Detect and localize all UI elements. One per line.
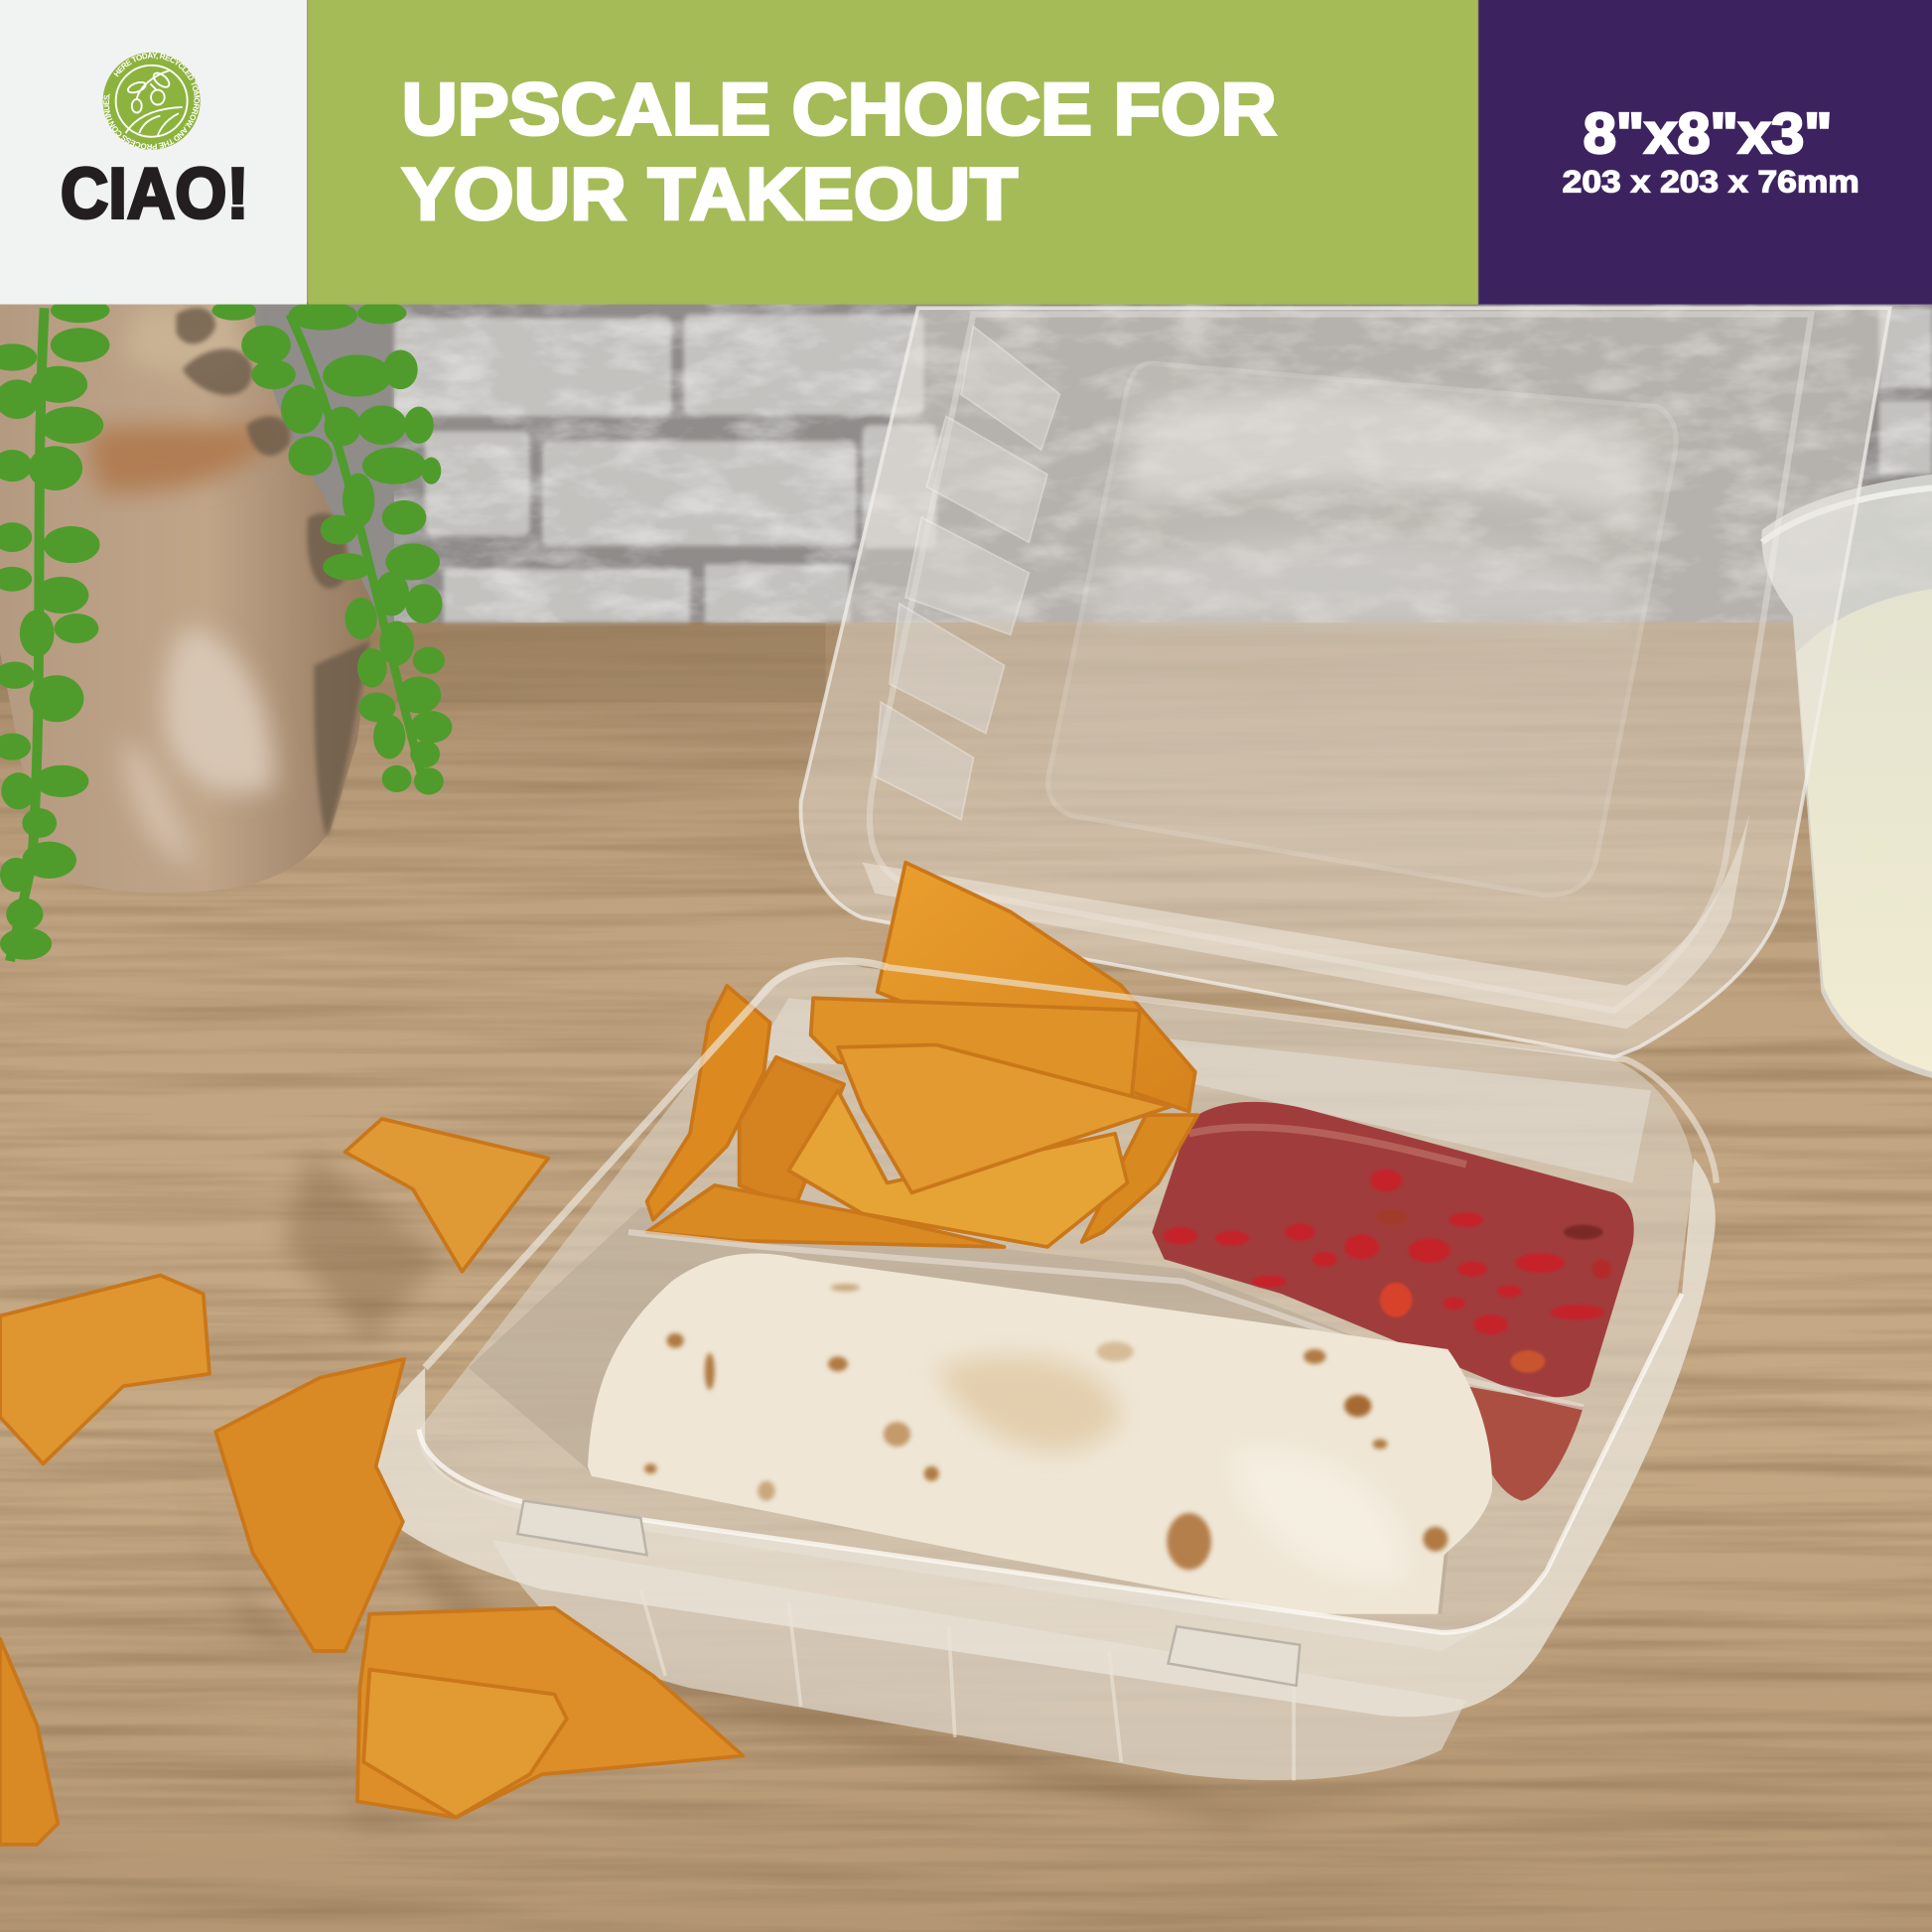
chip: far left xyxy=(0,1276,209,1463)
photo background: wood table xyxy=(0,622,1932,1932)
latch left xyxy=(517,1501,647,1555)
drinking cup with lemonade xyxy=(1761,475,1932,1078)
divider front of chips compartment xyxy=(628,1232,1584,1407)
plant: string of beads right strand xyxy=(211,301,452,794)
pot white scuffs xyxy=(164,628,274,793)
clamshell base: tray interior xyxy=(418,962,1694,1651)
tortilla chips inside container xyxy=(647,863,1197,1247)
logo badge: HERE TODAY, RECYCLED TOMORROW. AND THE PROCESS CONTINUES. xyxy=(103,52,200,150)
salsa chunks xyxy=(1164,1170,1611,1373)
plant: string of beads left strand xyxy=(0,298,109,961)
lid recessed window xyxy=(1048,363,1676,895)
photo background: white brick wall xyxy=(0,305,1932,622)
title: YOUR TAKEOUT xyxy=(402,153,1018,235)
pot leaf shadows xyxy=(176,308,369,838)
header: title panel xyxy=(308,0,1477,305)
loose tortilla chips on table xyxy=(0,1119,743,1845)
chip: behind container xyxy=(345,1119,548,1272)
shadow under container and chips xyxy=(173,1152,1453,1824)
burrito browned spots xyxy=(644,1284,1448,1570)
size in inches: 8"x8"x3" xyxy=(1584,102,1832,166)
size in millimetres: 203 x 203 x 76mm xyxy=(1563,165,1860,200)
header: logo panel xyxy=(0,0,308,305)
header: size panel xyxy=(1478,0,1932,305)
chip: folded front xyxy=(357,1608,743,1818)
title: UPSCALE CHOICE FOR xyxy=(402,68,1277,150)
logo wordmark: CIAO! xyxy=(61,155,249,234)
clamshell base: front rim with latches xyxy=(357,961,1717,1717)
lid ribbed side panel xyxy=(875,327,1059,819)
latch right xyxy=(1169,1626,1300,1686)
salsa compartment xyxy=(1152,1102,1634,1501)
title xyxy=(402,68,1277,235)
lid bottom rim xyxy=(863,813,1749,1029)
chip: center left xyxy=(215,1359,404,1651)
chip: bottom left edge xyxy=(0,1639,58,1845)
clear clamshell lid, open xyxy=(801,308,1890,1057)
clamshell base: lower tub xyxy=(492,1540,1466,1780)
burrito xyxy=(588,1254,1492,1614)
pot stain xyxy=(86,425,283,492)
terracotta pot xyxy=(0,305,374,893)
